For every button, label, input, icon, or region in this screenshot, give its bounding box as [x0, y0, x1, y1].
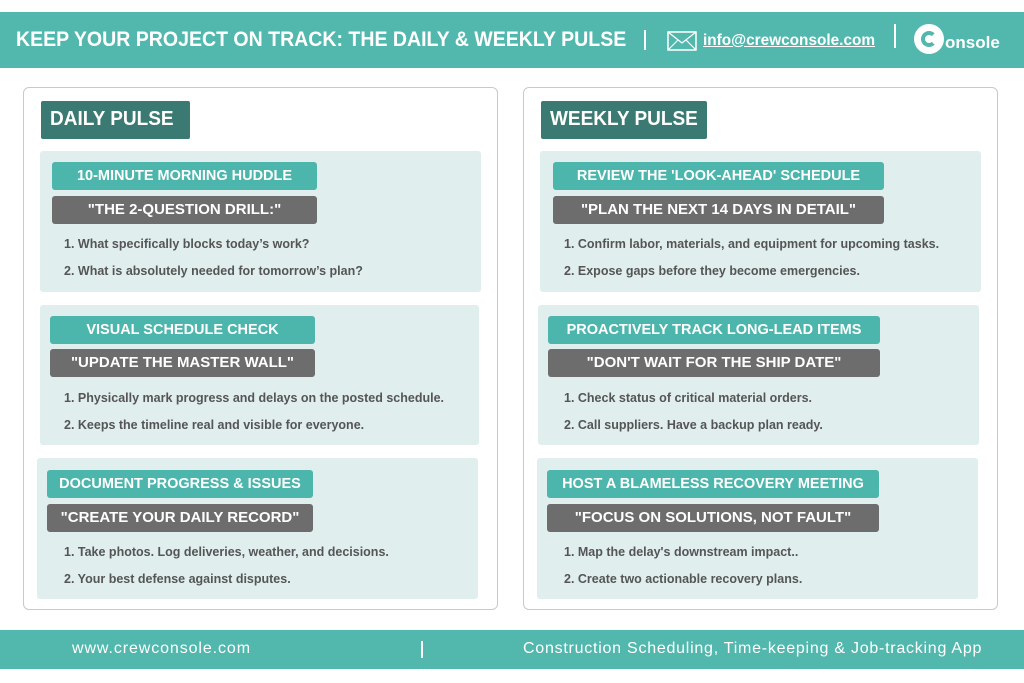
section: look-ahead: [540, 151, 981, 292]
section: recovery meeting: "FOCUS ON SOLUTIONS, NOT FAULT": [575, 509, 851, 526]
section: document progress: 1. Take photos. Log deliveries, weather, and decisions.: [64, 545, 389, 559]
heading: weekly pulse: WEEKLY PULSE: [550, 108, 698, 130]
heading: weekly pulse: [541, 101, 707, 139]
email contact: info@crewconsole.com: [703, 32, 875, 49]
section: long-lead items: [538, 305, 979, 445]
logo: [894, 24, 1000, 54]
section: look-ahead: "PLAN THE NEXT 14 DAYS IN DETAIL": [581, 201, 856, 218]
heading: daily pulse: [41, 101, 190, 139]
section: morning huddle: 2. What is absolutely needed for tomorrow’s plan?: [64, 264, 363, 278]
section: long-lead items: PROACTIVELY TRACK LONG-LEAD ITEMS: [567, 322, 861, 338]
section: recovery meeting: 2. Create two actionable recovery plans.: [564, 572, 802, 586]
panel: daily pulse: [23, 87, 498, 610]
heading: daily pulse: DAILY PULSE: [50, 108, 174, 130]
title: KEEP YOUR PROJECT ON TRACK: THE DAILY & WEEKLY PULSE: [16, 28, 626, 51]
section: long-lead items: 2. Call suppliers. Have a backup plan ready.: [564, 418, 823, 432]
section: recovery meeting: [537, 458, 978, 599]
section: visual schedule check: [40, 305, 479, 445]
section: document progress: "CREATE YOUR DAILY RECORD": [61, 509, 299, 526]
section: look-ahead: 2. Expose gaps before they become emergencies.: [564, 264, 860, 278]
section: look-ahead: REVIEW THE 'LOOK-AHEAD' SCHEDULE: [577, 168, 860, 184]
footer band: [0, 630, 1024, 669]
section: morning huddle: [40, 151, 481, 292]
section: document progress: 2. Your best defense against disputes.: [64, 572, 291, 586]
section: morning huddle: 10-MINUTE MORNING HUDDLE: [77, 168, 292, 184]
footer website: www.crewconsole.com: [72, 640, 251, 657]
section: long-lead items: 1. Check status of critical material orders.: [564, 391, 812, 405]
header band: [0, 12, 1024, 68]
panel: weekly pulse: [523, 87, 998, 610]
footer tagline: Construction Scheduling, Time-keeping & Job-tracking App: [523, 640, 982, 657]
section: visual schedule check: "UPDATE THE MASTER WALL": [71, 354, 294, 371]
section: morning huddle: 1. What specifically blocks today’s work?: [64, 237, 309, 251]
section: recovery meeting: HOST A BLAMELESS RECOVERY MEETING: [562, 476, 864, 492]
section: long-lead items: "DON'T WAIT FOR THE SHIP DATE": [587, 354, 841, 371]
logo: onsole: [945, 33, 1000, 52]
section: morning huddle: "THE 2-QUESTION DRILL:": [88, 201, 281, 218]
section: look-ahead: 1. Confirm labor, materials, and equipment for upcoming tasks.: [564, 237, 939, 251]
icon: envelope: [667, 31, 697, 51]
section: document progress: [37, 458, 478, 599]
section: recovery meeting: 1. Map the delay's downstream impact..: [564, 545, 798, 559]
section: visual schedule check: VISUAL SCHEDULE CHECK: [86, 322, 279, 338]
section: visual schedule check: 1. Physically mark progress and delays on the posted schedule.: [64, 391, 444, 405]
section: visual schedule check: 2. Keeps the timeline real and visible for everyone.: [64, 418, 364, 432]
section: document progress: DOCUMENT PROGRESS & ISSUES: [59, 476, 301, 492]
